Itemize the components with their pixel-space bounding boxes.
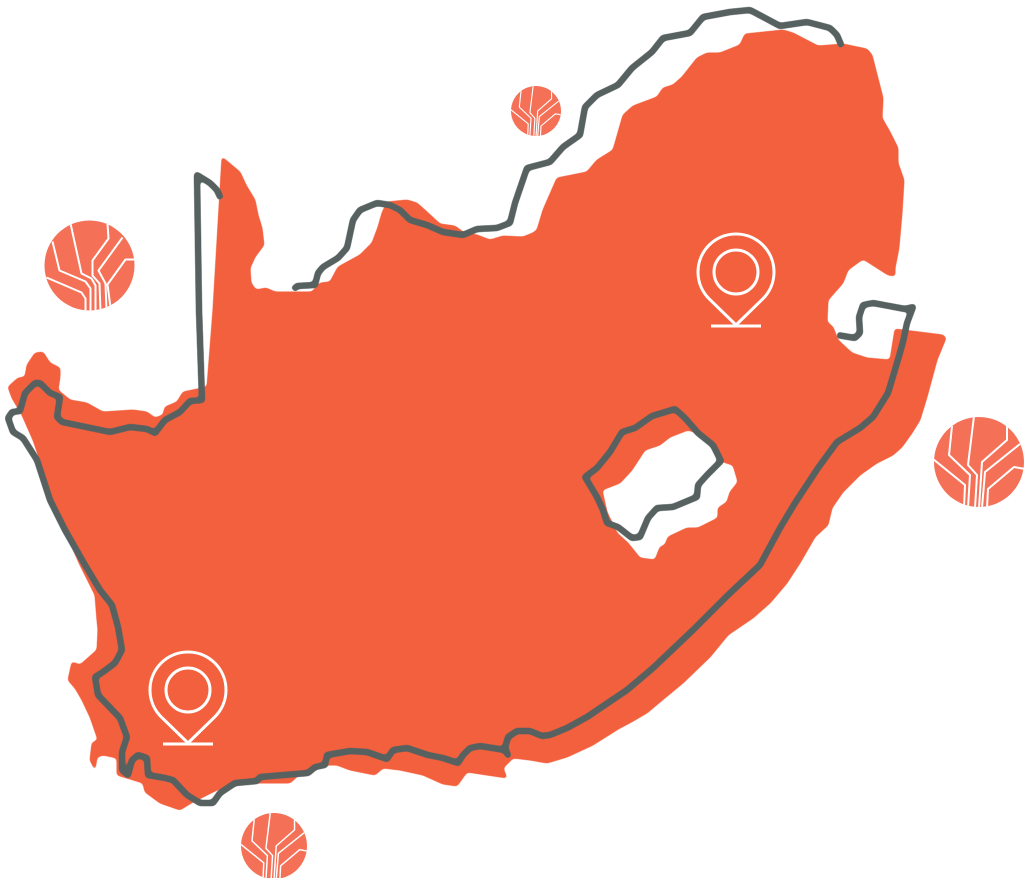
icon: circuit tree badge, north	[510, 85, 562, 137]
icon: location pin, Cape Town area	[150, 652, 226, 744]
border outline: Lesotho enclave	[585, 409, 721, 538]
border outline: north and west section	[293, 10, 842, 290]
border outline: south and east coast section	[8, 175, 913, 803]
icon: circuit tree badge, east	[933, 416, 1024, 508]
icon: circuit tree badge, south	[240, 812, 308, 878]
icon: circuit tree badge, west	[44, 220, 136, 312]
icon: location pin, Gauteng area	[698, 234, 774, 326]
